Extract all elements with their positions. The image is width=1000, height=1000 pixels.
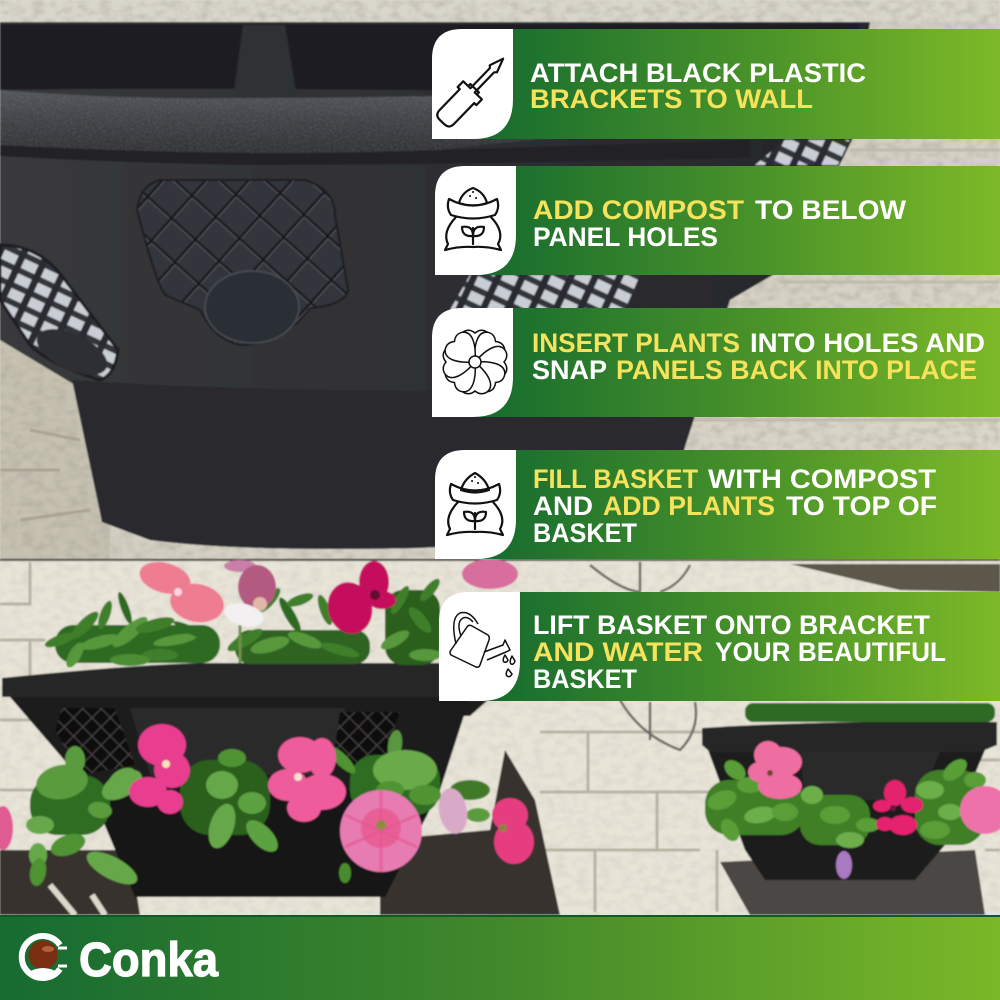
- icon: watering can: [450, 612, 515, 677]
- centre lattice panel: [137, 180, 348, 345]
- icon: screwdriver: [433, 50, 512, 131]
- brick shadow top right: [790, 564, 1000, 592]
- step 1 text: BRACKETS TO WALL: [530, 84, 813, 114]
- brick mortar lines: [0, 562, 1000, 912]
- step 4 text: [533, 464, 937, 548]
- step 3 text: INSERT PLANTS: [532, 328, 740, 358]
- flower: right basket pink: [748, 741, 802, 799]
- photo: empty basket on stone wall: [0, 0, 1000, 562]
- step 4 text: TO TOP OF: [786, 491, 937, 521]
- step 4 text: FILL BASKET: [533, 464, 698, 494]
- flower: hot pink left: [129, 724, 190, 814]
- left basket rim: [2, 663, 440, 697]
- step 4 panel: [435, 450, 1000, 559]
- middle lattice panel: [450, 275, 640, 310]
- step 3 text: [532, 328, 985, 385]
- step 5 text: AND WATER: [533, 637, 703, 667]
- right basket body: [708, 750, 985, 880]
- footer bar: [0, 915, 1000, 1000]
- foliage right basket: [705, 703, 995, 848]
- step 3 text: SNAP: [532, 355, 607, 385]
- icon: compost bag: [445, 188, 501, 250]
- step 3 banner: [470, 308, 1000, 417]
- step 4 icon tile: [435, 450, 516, 559]
- step 1 text: [530, 58, 866, 114]
- photo: planted baskets on brick wall: [0, 557, 1000, 917]
- flower: small violet: [836, 851, 852, 879]
- flower: pale petunia: [435, 786, 471, 836]
- wire hanger: [590, 562, 696, 750]
- flower: large striped petunia: [340, 790, 422, 872]
- flower: mauve petunia: [224, 560, 276, 611]
- step 1 text: ATTACH BLACK PLASTIC: [530, 58, 866, 88]
- step 2 panel: [435, 166, 1000, 275]
- flower: right basket magenta: [873, 780, 923, 835]
- step 4 banner: [473, 450, 1000, 559]
- flower: white petunia: [222, 599, 266, 631]
- step 1 banner: [470, 29, 1000, 139]
- step 2 text: ADD COMPOST: [533, 195, 745, 225]
- step 4 text: AND: [533, 491, 593, 521]
- left basket body: [10, 697, 470, 790]
- left basket lattice: [55, 708, 135, 775]
- step 2 text: TO BELOW: [755, 195, 907, 225]
- step 5 text: LIFT BASKET ONTO BRACKET: [533, 610, 930, 640]
- flower: hot pink right: [492, 798, 534, 864]
- step 2 banner: [473, 166, 1000, 275]
- basket divider: [233, 25, 297, 98]
- step 5 text: YOUR BEAUTIFUL: [715, 637, 946, 667]
- right lattice panel: [755, 140, 852, 165]
- step 5 text: BASKET: [533, 664, 637, 694]
- step 2 text: [533, 195, 907, 252]
- right basket rim: [702, 722, 997, 752]
- flower: top right petunia: [462, 559, 518, 589]
- flower: magenta petunia: [322, 561, 396, 639]
- wall shadow left basket: [0, 750, 560, 915]
- bottom foliage left basket: [26, 729, 490, 891]
- icon: flower: [442, 329, 508, 395]
- step 1 icon tile: [432, 29, 513, 139]
- wall shadow right basket: [720, 850, 985, 915]
- step 5 text: [533, 610, 946, 694]
- step 5 panel: [439, 592, 1000, 701]
- basket outer body: [0, 22, 870, 549]
- step 4 text: WITH COMPOST: [708, 464, 937, 494]
- top foliage left basket: [43, 576, 443, 670]
- step 3 panel: [432, 308, 1000, 417]
- flower: pink centre: [268, 737, 346, 822]
- step 2 icon tile: [435, 166, 516, 275]
- step 3 text: PANELS BACK INTO PLACE: [616, 355, 977, 385]
- icon: compost bag: [447, 473, 503, 535]
- basket rim: [0, 90, 850, 153]
- step 4 text: BASKET: [533, 518, 637, 548]
- centre panel round cap: [205, 271, 299, 343]
- step 2 text: PANEL HOLES: [533, 222, 718, 252]
- flower: salmon petunia: [136, 557, 227, 626]
- step 3 icon tile: [432, 308, 513, 417]
- step 4 text: ADD PLANTS: [603, 491, 775, 521]
- logo mark: [22, 936, 67, 978]
- flower: right basket edge: [960, 786, 1000, 834]
- flower: edge petunia: [0, 806, 13, 850]
- logo wordmark: Conka: [79, 934, 218, 987]
- basket interior: [0, 24, 860, 100]
- step 3 text: INTO HOLES AND: [750, 328, 985, 358]
- stone texture: [0, 0, 1000, 562]
- step 1 panel: [432, 29, 1000, 139]
- basket lower band: [72, 380, 700, 549]
- left lattice panel: [0, 245, 118, 380]
- step 5 icon tile: [439, 592, 520, 701]
- step 5 banner: [477, 592, 1000, 701]
